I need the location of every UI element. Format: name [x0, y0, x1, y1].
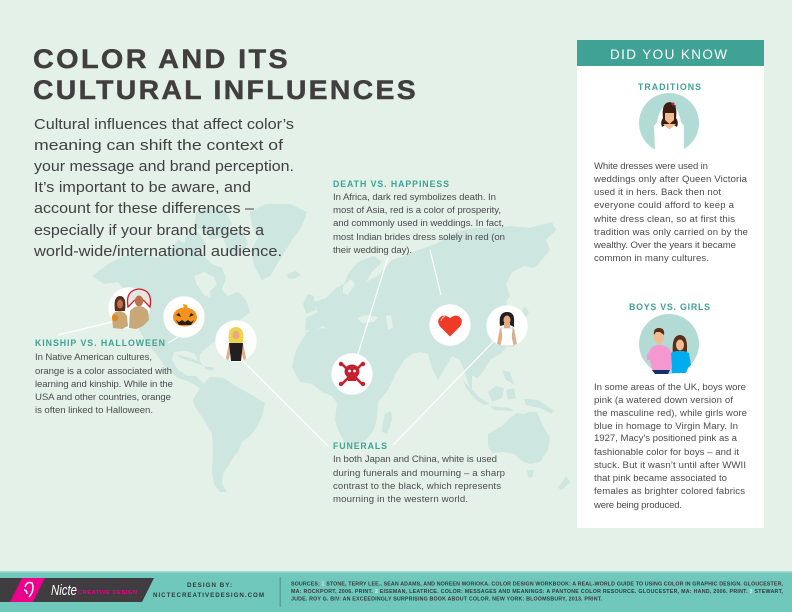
heading: boys vs. girls: BOYS VS. GIRLS	[629, 302, 710, 312]
connector lines	[58, 250, 493, 446]
design credit: NICTECREATIVEDESIGN.COM	[153, 592, 264, 599]
text: boys vs. girls: In some areas of the UK, boys wore	[594, 382, 746, 393]
text: traditions: everyone could afford to keep a	[594, 200, 735, 211]
text: traditions: used it in hers. Back then not	[594, 187, 721, 198]
title: CULTURAL INFLUENCES	[33, 75, 418, 105]
text block: funerals	[333, 441, 505, 505]
footer band	[0, 571, 792, 612]
sources: MA: ROCKPORT, 2006. PRINT. 2 EISEMAN, LEATRICE. COLOR: MESSAGES AND MEANINGS: A PANTONE COLOR RESOURCE. GLOUCESTER, MA: HAND, 2006. PRINT. 3 STEWART,	[291, 589, 784, 595]
intro text: your message and brand perception.	[34, 158, 294, 175]
text: boys vs. girls: stuck. But it wasn’t until after WWII	[594, 460, 746, 471]
text: boys vs. girls	[593, 382, 747, 511]
text: boys vs. girls: 1927, Macy’s positioned pink as a	[594, 433, 738, 444]
text block: kinship vs. halloween	[35, 338, 173, 416]
text block: death vs. happiness: DEATH VS. HAPPINESS	[333, 179, 449, 189]
text block: funerals: mourning in the western world.	[333, 494, 468, 505]
title: COLOR AND ITS	[33, 44, 290, 74]
text: boys vs. girls: the masculine red), while girls wore	[594, 408, 747, 419]
text block: kinship vs. halloween: USA and other countries, orange	[35, 392, 171, 403]
title	[33, 44, 418, 105]
text block: funerals: contrast to the black, which represents	[333, 481, 501, 492]
text: traditions: wealthy. Over the years it became	[593, 240, 736, 251]
intro text: world-wide/international audience.	[33, 243, 282, 260]
intro text: Cultural influences that affect color’s	[34, 116, 294, 133]
text block: kinship vs. halloween: is often linked to Halloween.	[35, 405, 153, 416]
panel: did you know	[577, 40, 764, 528]
text: traditions: White dresses were used in	[594, 161, 708, 172]
text: traditions: weddings only after Queen Victoria	[593, 174, 748, 185]
icon: dark-haired woman in white	[486, 305, 528, 347]
text block: death vs. happiness: In Africa, dark red symbolizes death. In	[333, 192, 496, 203]
text block: funerals: In both Japan and China, white is used	[333, 454, 497, 465]
text block: death vs. happiness: most Indian brides dress solely in red (on	[333, 232, 505, 243]
text: traditions: common in many cultures.	[594, 253, 709, 264]
text block: kinship vs. halloween: KINSHIP VS. HALLOWEEN	[35, 338, 165, 348]
text block: death vs. happiness: and commonly used in weddings. In fact,	[333, 218, 504, 229]
icon: heart	[429, 304, 471, 346]
world map	[92, 204, 570, 492]
heading: traditions: TRADITIONS	[638, 82, 701, 92]
intro text: It’s important to be aware, and	[34, 179, 251, 196]
text: traditions: tradition was only carried on by the	[594, 227, 748, 238]
icon: bride	[639, 93, 699, 154]
icon: skull and crossbones	[331, 353, 373, 395]
intro text: especially if your brand targets a	[34, 222, 265, 239]
intro text	[33, 116, 294, 260]
panel header	[577, 40, 764, 66]
text: traditions	[593, 161, 748, 264]
icon: native american couple	[108, 287, 151, 329]
text: boys vs. girls: females as brighter colored fabrics	[594, 486, 745, 497]
text block: kinship vs. halloween: orange is a color associated with	[35, 366, 172, 377]
text block: death vs. happiness: their wedding day).	[333, 245, 412, 256]
text block: death vs. happiness: most of Asia, red is a color of prosperity,	[333, 205, 501, 216]
text: boys vs. girls: were being produced.	[593, 500, 682, 511]
icon: boy and girl	[639, 314, 699, 374]
panel header: DID YOU KNOW	[610, 47, 727, 62]
design credit	[153, 582, 264, 599]
sources: JUDE. ROY G. BIV: AN EXCEEDINGLY SURPRISING BOOK ABOUT COLOR. NEW YORK: BLOOMSBURY, 2013. PRINT.	[291, 596, 603, 602]
text block: kinship vs. halloween: learning and kinship. While in the	[35, 379, 173, 390]
sources	[291, 582, 784, 602]
text: boys vs. girls: that pink became associated to	[594, 473, 727, 484]
text: boys vs. girls: fashionable color for boys – and it	[594, 447, 739, 458]
logo banner: CREATIVE DESIGN	[78, 590, 137, 596]
icon: blonde woman in black	[215, 320, 257, 362]
text block: death vs. happiness	[333, 179, 505, 256]
text: boys vs. girls: blue in homage to Virgin Mary. In	[594, 421, 738, 432]
text: boys vs. girls: pink (a watered down version of	[594, 395, 733, 406]
sources: SOURCES: 1 STONE, TERRY LEE., SEAN ADAMS, AND NOREEN MORIOKA. COLOR DESIGN WORKBOOK: A REAL-WORLD GUIDE TO USING COLOR IN GRAPHIC DESIGN. GLOUCESTER,	[291, 582, 784, 588]
text: traditions: white dress clean, so at first this	[593, 214, 735, 225]
design credit: DESIGN BY:	[187, 582, 232, 589]
text block: funerals: FUNERALS	[333, 441, 387, 451]
logo banner	[0, 578, 154, 602]
text block: kinship vs. halloween: In Native American cultures,	[35, 352, 152, 363]
intro text: account for these differences –	[34, 200, 255, 217]
text block: funerals: during funerals and mourning – a sharp	[333, 468, 505, 479]
intro text: meaning can shift the context of	[34, 137, 284, 154]
logo banner: Nicte	[51, 582, 77, 599]
icon: pumpkin	[163, 296, 205, 338]
